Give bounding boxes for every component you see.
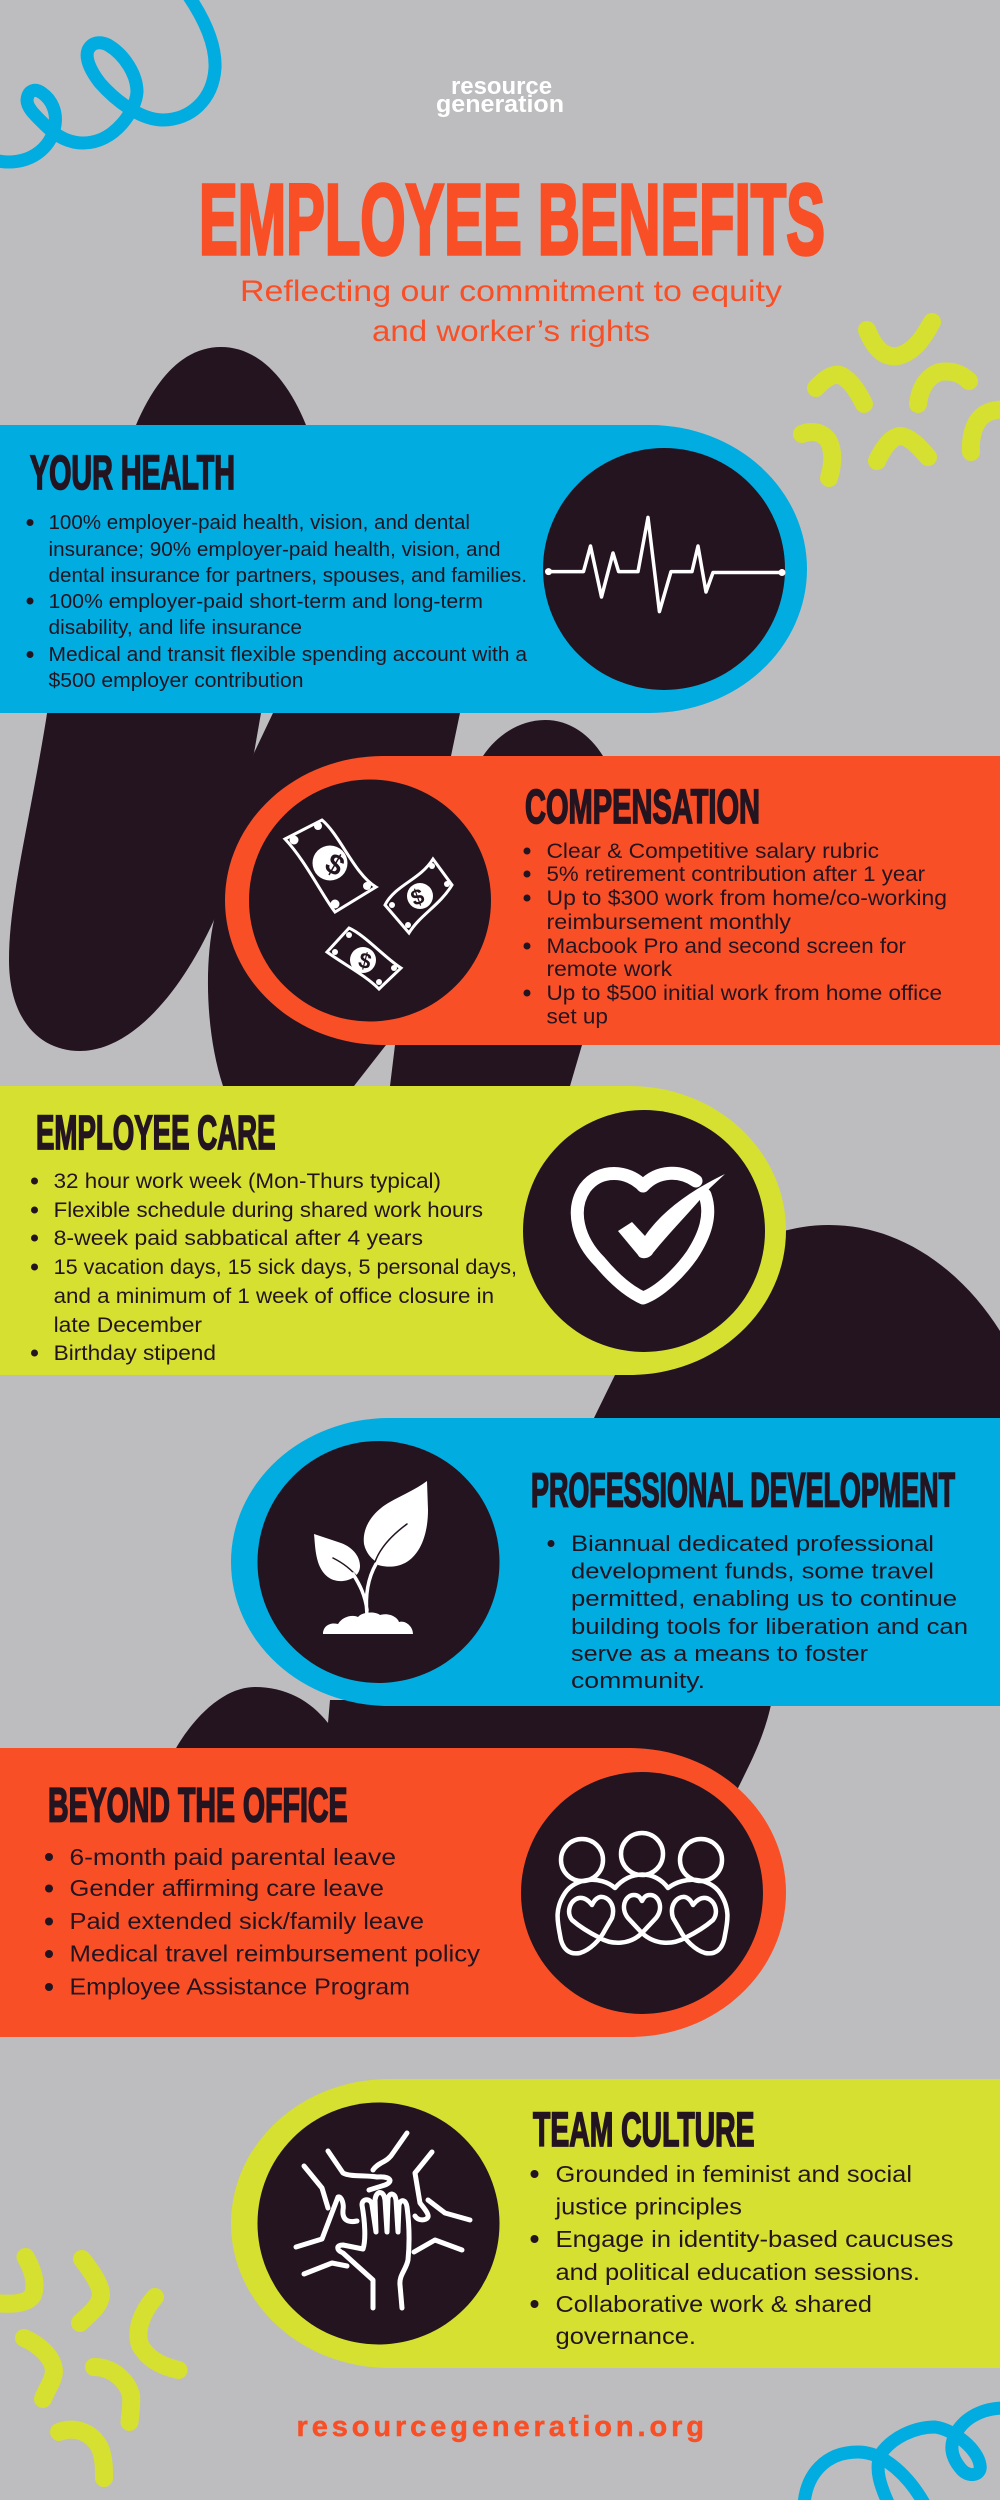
background blobs [9,347,1000,1790]
list: health benefits: disability, and life insurance [48,616,302,639]
list: beyond the office benefits: 6-month paid parental leave [70,1844,396,1870]
icon: stacked hands [258,2102,500,2344]
icon: money bills [249,780,491,1022]
list: compensation benefits: reimbursement monthly [546,911,792,934]
list: professional development benefits: development funds, some travel [571,1559,934,1584]
list: professional development benefits: building tools for liberation and can [571,1614,968,1639]
list: employee care benefits: 32 hour work week (Mon-Thurs typical) [54,1170,441,1193]
list: compensation benefits: remote work [546,958,673,981]
heading: compensation: COMPENSATION [525,781,760,834]
list: compensation benefits: Clear & Competitive salary rubric [546,840,879,863]
panel: compensation [225,756,1000,1045]
list: compensation benefits: 5% retirement contribution after 1 year [546,863,925,886]
list: employee care benefits: and a minimum of 1 week of office closure in [54,1285,494,1308]
list: team culture benefits: justice principles [554,2194,742,2220]
list: beyond the office benefits: Medical travel reimbursement policy [70,1940,481,1966]
list: compensation benefits: Up to $500 initial work from home office [546,982,942,1005]
list: health benefits: 100% employer-paid health, vision, and dental [48,511,470,534]
list: beyond the office benefits: Employee Assistance Program [70,1974,410,2000]
list: professional development benefits: Biannual dedicated professional [571,1531,934,1556]
list: team culture benefits: Engage in identity-based caucuses [556,2226,954,2252]
blue squiggle top left [0,0,215,162]
panel: your health [0,425,807,713]
list: health benefits: 100% employer-paid short-term and long-term [48,590,483,613]
logo: resource generation: generation [436,91,564,118]
lime squiggles bottom left [0,2257,178,2478]
list: team culture benefits: and political education sessions. [556,2259,920,2285]
subtitle [240,275,782,348]
list: employee care benefits: Birthday stipend [54,1342,216,1365]
icon: plant sprout [258,1441,500,1683]
panel: professional development [231,1418,1000,1706]
heading: team culture: TEAM CULTURE [533,2104,754,2157]
panel: team culture [231,2079,1000,2368]
list: professional development benefits [548,1531,968,1693]
list: compensation benefits [524,840,947,1028]
list: team culture benefits: Collaborative work & shared [556,2291,872,2317]
list: health benefits: dental insurance for partners, spouses, and families. [48,564,527,587]
list: team culture benefits [530,2161,954,2349]
subtitle: Reflecting our commitment to equity [240,275,782,308]
list: professional development benefits: community. [571,1668,705,1693]
list: compensation benefits: Up to $300 work from home/co-working [546,887,947,910]
list: employee care benefits [31,1170,517,1365]
lime squiggles top right [802,322,1000,478]
website url: resourcegeneration.org [296,2411,704,2443]
icon: money bills: $ [356,947,374,974]
list: health benefits: $500 employer contribution [48,669,304,692]
list: health benefits [26,511,528,692]
icon: people with hearts [521,1772,763,2014]
heading: your health: YOUR HEALTH [30,447,235,500]
icon: money bills: $ [320,847,349,883]
panel: employee care [0,1086,786,1375]
list: beyond the office benefits [45,1844,481,2000]
list: employee care benefits: Flexible schedule during shared work hours [54,1199,483,1222]
list: health benefits: insurance; 90% employer-paid health, vision, and [48,538,500,561]
list: employee care benefits: 15 vacation days, 15 sick days, 5 personal days, [54,1256,517,1279]
list: professional development benefits: permitted, enabling us to continue [571,1586,957,1611]
list: team culture benefits: Grounded in feminist and social [556,2161,912,2187]
list: compensation benefits: Macbook Pro and second screen for [546,935,906,958]
subtitle: and worker’s rights [372,315,650,348]
list: team culture benefits: governance. [556,2323,696,2349]
icon: heartbeat [543,448,786,690]
list: beyond the office benefits: Paid extended sick/family leave [70,1908,424,1934]
icon: heart with check [523,1110,765,1352]
panel: beyond the office [0,1748,786,2037]
list: health benefits: Medical and transit flexible spending account with a [48,643,528,666]
list: beyond the office benefits: Gender affirming care leave [70,1875,384,1901]
heading: employee care: EMPLOYEE CARE [36,1107,276,1160]
logo: resource generation [436,73,564,118]
blue squiggle bottom right [804,2408,1000,2500]
list: employee care benefits: late December [54,1314,202,1337]
logo: resource generation: resource [451,73,552,100]
icon: money bills: $ [407,883,427,911]
list: professional development benefits: serve as a means to foster [571,1641,868,1666]
heading: beyond the office: BEYOND THE OFFICE [48,1780,348,1832]
list: compensation benefits: set up [546,1006,608,1028]
list: employee care benefits: 8-week paid sabbatical after 4 years [54,1227,423,1250]
